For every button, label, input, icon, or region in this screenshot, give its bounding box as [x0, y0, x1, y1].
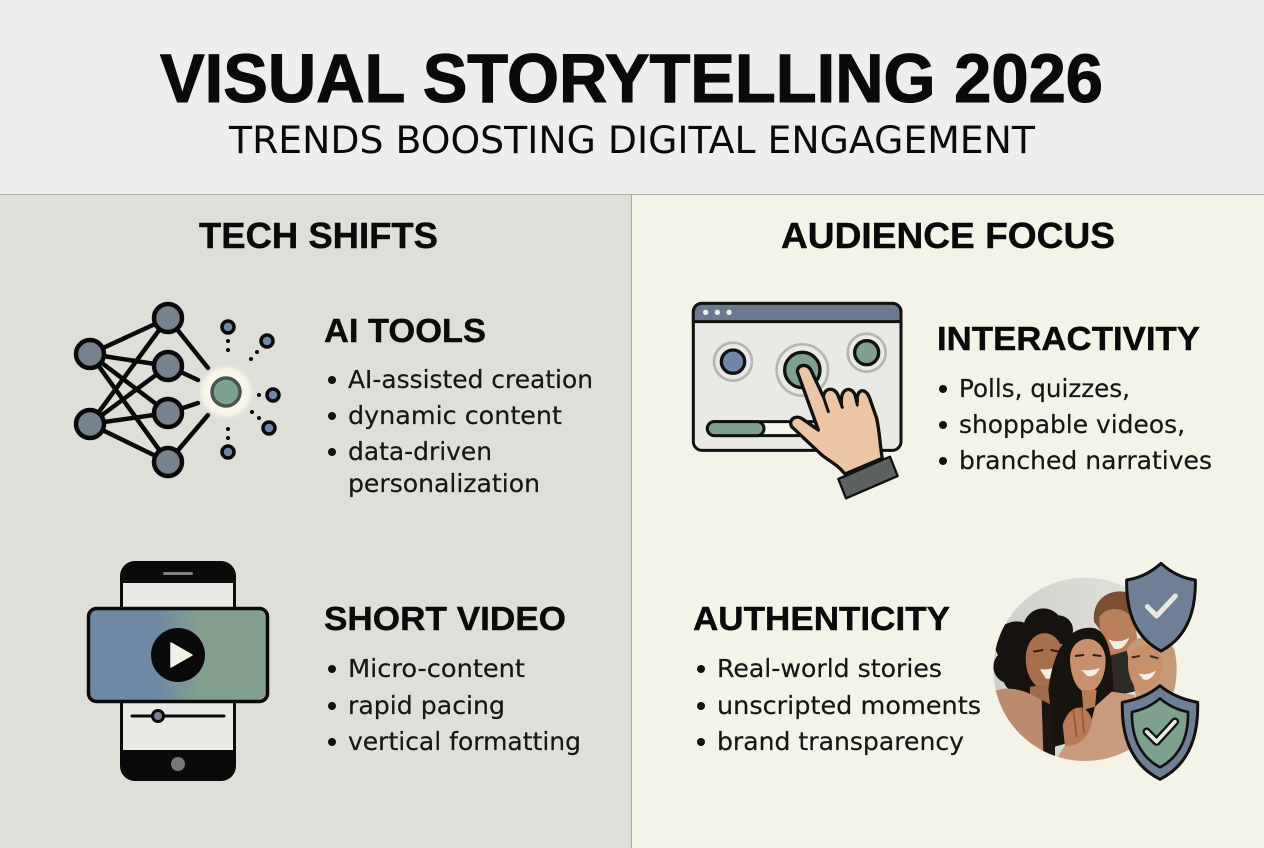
bullet list: AI tools: [328, 365, 593, 498]
bullet list: short video: rapid pacing: [348, 691, 505, 720]
bullet list: AI tools: dynamic content: [348, 401, 562, 430]
panel: audience focus background: [632, 195, 1264, 848]
icon: group photo with shields: [990, 563, 1198, 779]
bullet list: AI tools: AI-assisted creation: [348, 365, 593, 394]
bullet list: interactivity: Polls, quizzes,: [959, 374, 1130, 403]
icon: interactive window with hand: [693, 303, 901, 498]
subtitle: TRENDS BOOSTING DIGITAL ENGAGEMENT: [228, 119, 1035, 162]
bullet list: authenticity: brand transparency: [717, 727, 964, 756]
bullet list: authenticity: Real-world stories: [717, 654, 942, 683]
icon: phone with video: [88, 561, 268, 781]
bullet list: AI tools: personalization: [348, 469, 540, 498]
bullet list: interactivity: branched narratives: [959, 446, 1212, 475]
text block: AI tools: [324, 312, 593, 498]
bullet list: authenticity: unscripted moments: [717, 691, 981, 720]
heading: tech shifts: TECH SHIFTS: [199, 215, 438, 256]
bullet list: short video: vertical formatting: [348, 727, 581, 756]
text block: short video: [324, 600, 581, 756]
heading: short video: SHORT VIDEO: [324, 600, 566, 637]
icon: blue shield: [1127, 563, 1195, 651]
panel: header background: [0, 0, 1264, 194]
bullet list: interactivity: [939, 374, 1212, 475]
heading: interactivity: INTERACTIVITY: [937, 320, 1200, 357]
bullet list: AI tools: data-driven: [348, 437, 492, 466]
bullet list: short video: Micro-content: [348, 654, 525, 683]
woman at left: [993, 608, 1073, 694]
icon: green shield: [1122, 686, 1198, 779]
text block: authenticity: [693, 600, 981, 756]
icon: neural network: [76, 304, 279, 476]
heading: AI tools: AI TOOLS: [324, 312, 486, 349]
panel: tech shifts background: [0, 195, 631, 848]
bullet list: authenticity: [697, 654, 981, 756]
man at back: [1094, 591, 1140, 697]
bullet list: short video: [328, 654, 581, 756]
text block: interactivity: [937, 320, 1212, 475]
heading: audience focus: AUDIENCE FOCUS: [781, 215, 1115, 256]
bullet list: interactivity: shoppable videos,: [959, 410, 1185, 439]
woman at centre: [1048, 628, 1114, 747]
woman at right: [1127, 637, 1178, 700]
heading: authenticity: AUTHENTICITY: [693, 600, 950, 637]
photo: laughing group: [990, 577, 1180, 767]
title: VISUAL STORYTELLING 2026: [160, 40, 1103, 117]
